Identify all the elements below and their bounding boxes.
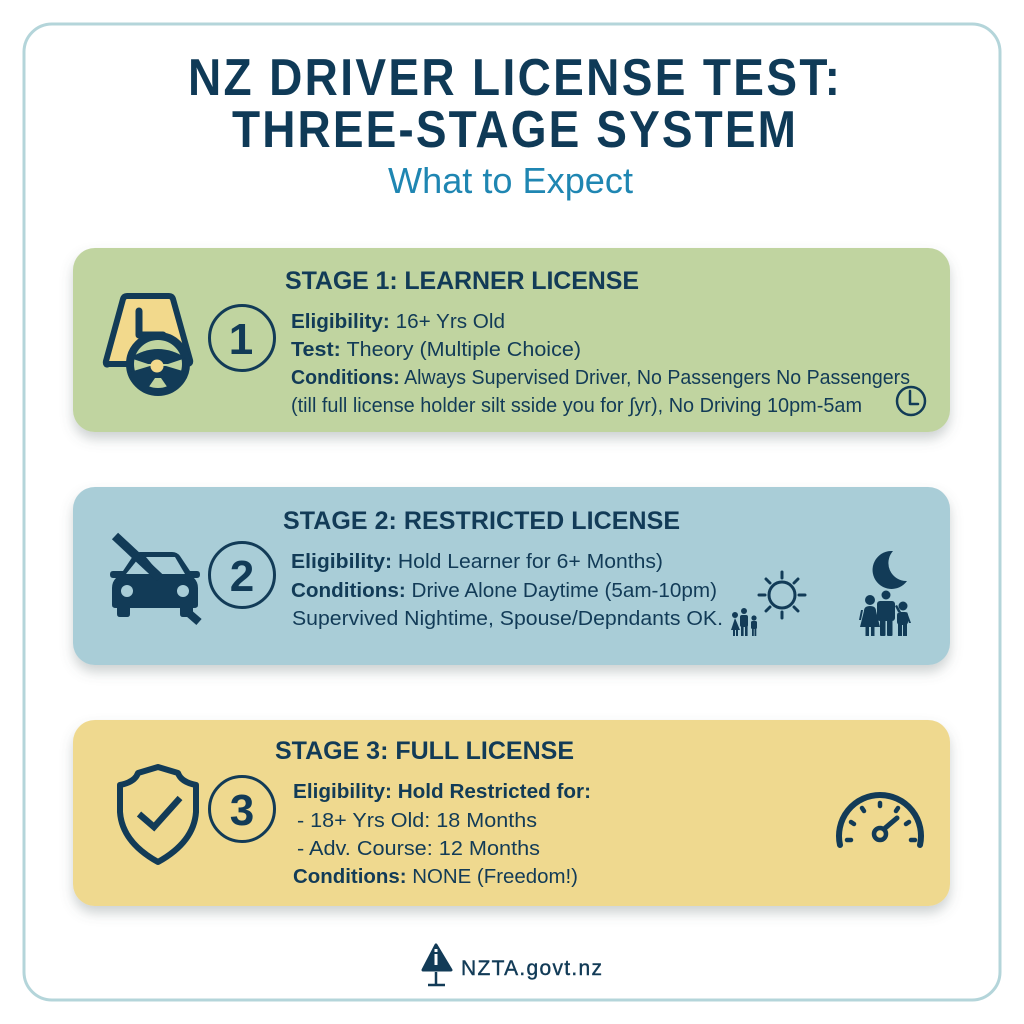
body text: Conditions: Always Supervised Driver, No Passengers No Passengers [291,367,910,389]
body text: Eligibility: Hold Restricted for: [293,781,591,803]
icon: sun [759,572,805,618]
body text: Eligibility: Hold Learner for 6+ Months) [291,551,663,573]
body text: (till full license holder silt sside you for ∫yr), No Driving 10pm-5am [291,395,862,417]
panel: stage 1 learner license [73,248,950,432]
body text: Conditions: Drive Alone Daytime (5am-10pm) [291,580,717,602]
icon: large family [859,590,911,636]
heading: STAGE 3: FULL LICENSE [275,737,574,765]
body text: Conditions: NONE (Freedom!) [293,866,578,888]
source text: NZTA.govt.nz [461,957,602,980]
panel: stage 2 restricted license [73,487,950,665]
icon: small family [731,608,757,636]
number badge 3 [210,776,274,842]
icon: moon [873,551,907,589]
title [188,50,840,159]
title: THREE-STAGE SYSTEM [232,102,796,159]
panel: stage 3 full license [73,720,950,906]
subtitle: What to Expect [388,160,633,201]
body text [291,551,723,630]
title: NZ DRIVER LICENSE TEST: [188,50,840,107]
body text: Eligibility: 16+ Yrs Old [291,311,505,333]
footer: source [423,945,602,985]
number badge 1 [210,306,274,370]
number badge 3: 3 [230,786,254,835]
body text: - Adv. Course: 12 Months [297,838,540,860]
body text [291,311,910,417]
body text [293,781,591,888]
body text: - 18+ Yrs Old: 18 Months [297,810,537,832]
heading: STAGE 1: LEARNER LICENSE [285,267,639,295]
number badge 2 [210,542,274,608]
icon: warning sign [423,945,451,985]
number badge 1: 1 [229,315,253,364]
icon: clock [897,387,925,415]
icon: car crossed out [110,536,200,622]
icon: shield with check [120,767,196,862]
number badge 2: 2 [230,552,254,601]
body text: Test: Theory (Multiple Choice) [291,339,581,361]
icon: speedometer [839,795,921,845]
heading: STAGE 2: RESTRICTED LICENSE [283,507,680,535]
body text: Supervived Nightime, Spouse/Depndants OK. [292,608,723,630]
icon: learner car with steering wheel [106,296,190,392]
